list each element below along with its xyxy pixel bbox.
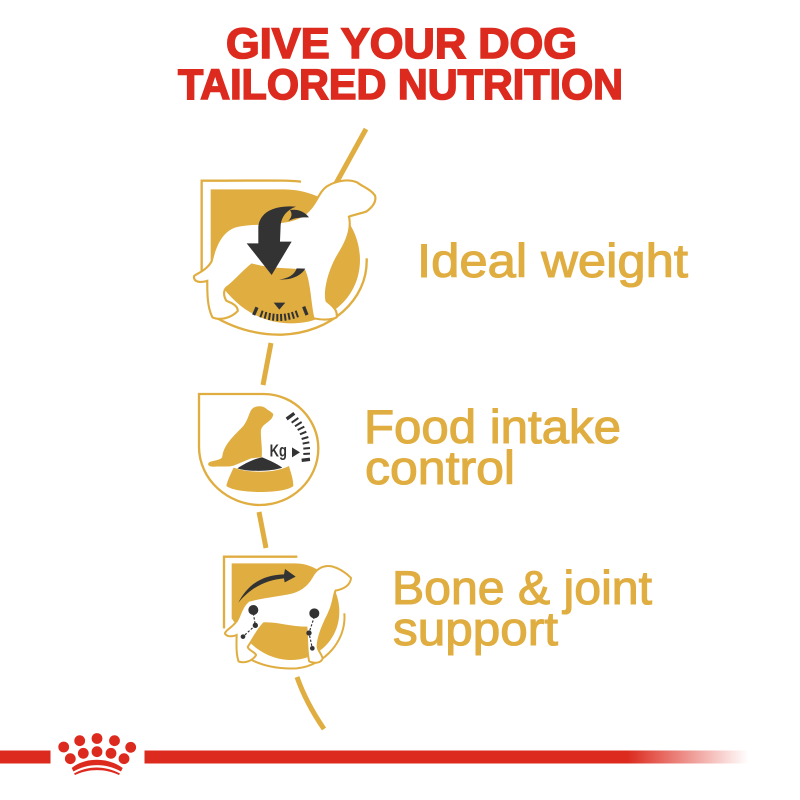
- title: TAILORED NUTRITION: [178, 61, 623, 109]
- connecting curved line: [259, 129, 366, 729]
- motion arrow: [238, 569, 296, 603]
- label: food intake control: [364, 400, 621, 494]
- gold disc: [211, 189, 360, 323]
- shield outline: [199, 394, 318, 505]
- label: ideal weight: Ideal weight: [417, 234, 688, 287]
- outer arc: [212, 258, 367, 335]
- sitting dog: [208, 406, 273, 467]
- title: [178, 20, 623, 109]
- label: food intake control: control: [365, 441, 515, 494]
- dog silhouette: [195, 182, 374, 318]
- outer arc: [252, 613, 344, 668]
- icon: food intake control: [199, 394, 318, 505]
- icon: crown logo: [58, 733, 136, 775]
- label: bone and joint support: Bone & joint: [392, 561, 652, 614]
- icon: bone and joint support: [224, 557, 350, 668]
- kg pointer: [292, 447, 300, 457]
- footer band right: [144, 750, 748, 764]
- label: bone and joint support: support: [393, 602, 558, 655]
- kg label: Kg: [270, 441, 287, 461]
- shield outline: [202, 181, 301, 272]
- food: [237, 457, 282, 471]
- label: bone and joint support: [392, 561, 652, 655]
- icon: ideal weight: [195, 181, 374, 335]
- weight gauge: [254, 307, 307, 321]
- gold disc: [232, 563, 339, 660]
- footer band left: [0, 750, 50, 764]
- title: GIVE YOUR DOG: [226, 20, 577, 68]
- bowl: [226, 466, 293, 492]
- joints: [241, 605, 319, 651]
- dog silhouette: [226, 567, 350, 662]
- shield outline: [224, 557, 297, 628]
- label: food intake control: Food intake: [364, 400, 621, 453]
- scale ticks: [287, 413, 310, 460]
- weight arrow: [247, 206, 309, 280]
